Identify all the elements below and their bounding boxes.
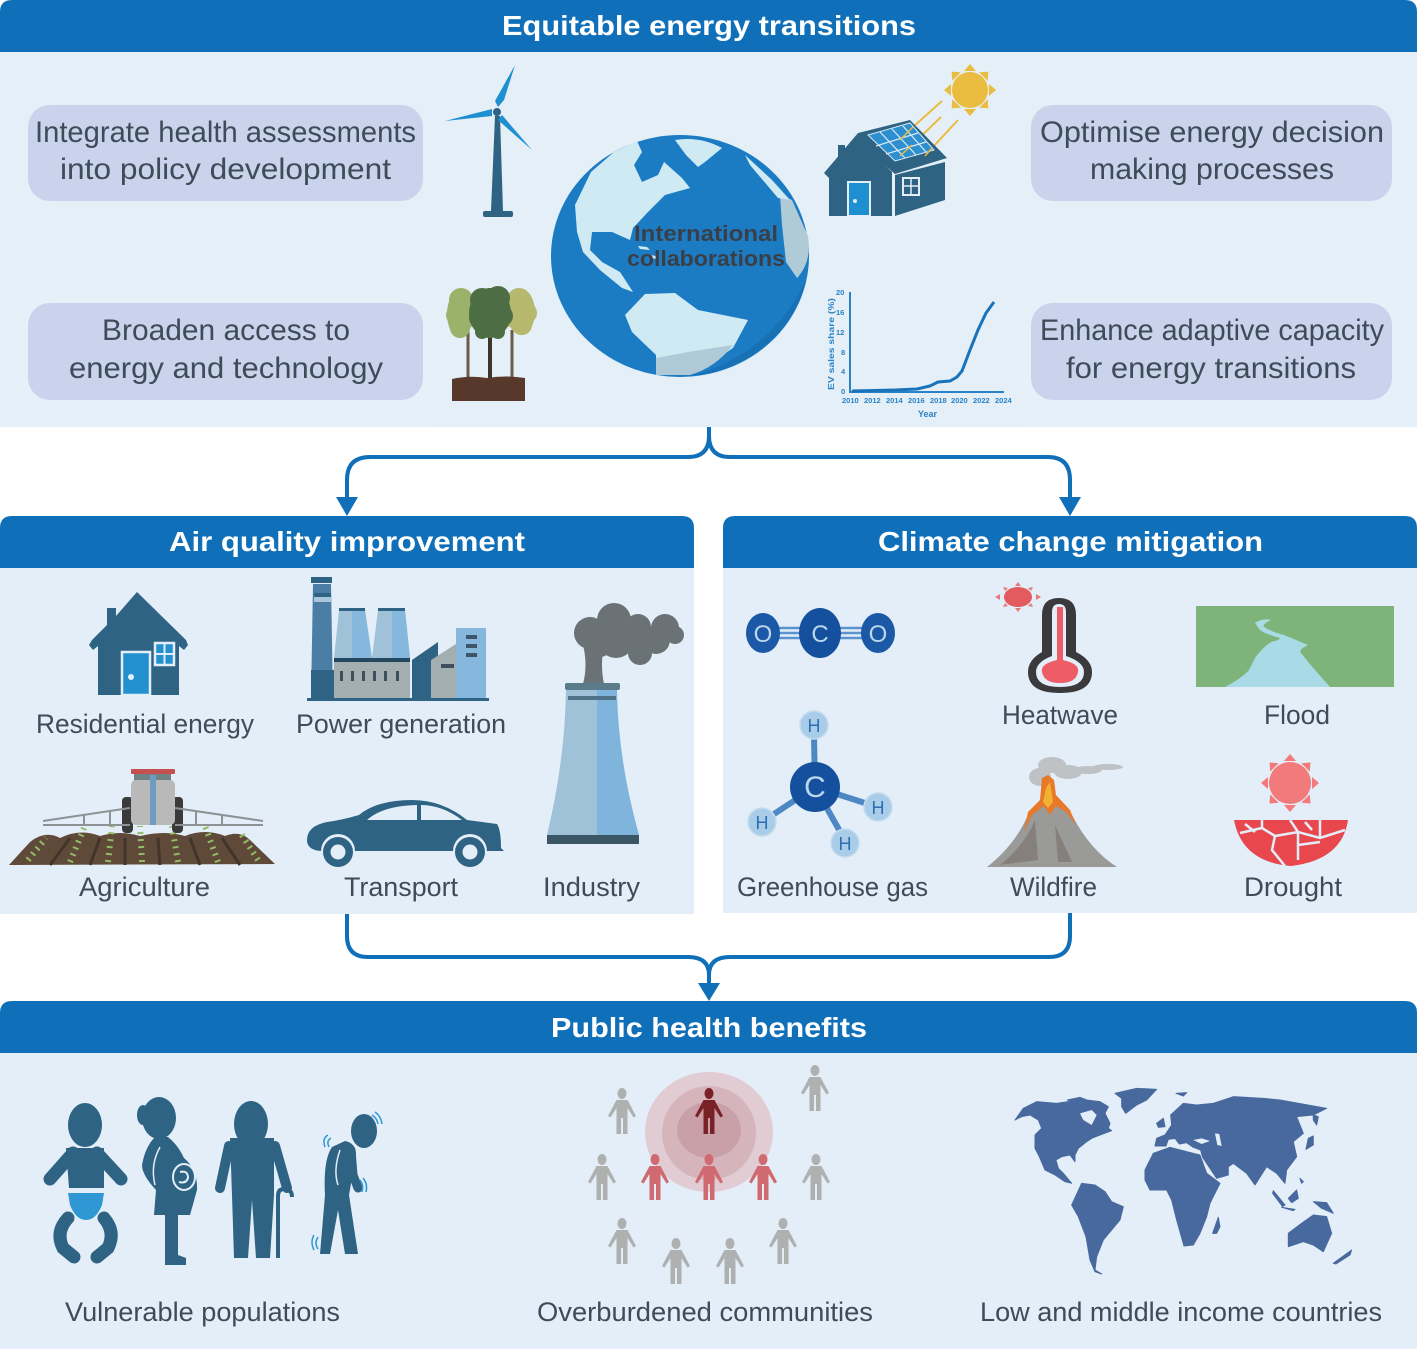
icon: power plant: [307, 577, 489, 701]
icon: world map: [1015, 1088, 1352, 1274]
icon: methane molecule: H: [808, 716, 820, 736]
arrow: energy transitions to air quality and climate: [336, 427, 1081, 516]
callout: enhance adaptive capacity: Enhance adaptive capacity: [1040, 314, 1384, 347]
label: agriculture: Agriculture: [79, 872, 210, 902]
chart: EV sales share: 2014: [886, 396, 904, 405]
chart: EV sales share: 20: [836, 288, 844, 297]
label: residential energy: Residential energy: [36, 709, 254, 739]
label: industry: Industry: [543, 872, 641, 902]
icon: vulnerable people: [50, 1097, 382, 1265]
callout: optimise energy decision making: making processes: [1090, 153, 1334, 186]
arrow: air quality and climate to public health: [347, 913, 1070, 1001]
label: power generation: Power generation: [296, 709, 506, 739]
icon: methane molecule: H: [756, 813, 768, 833]
label: vulnerable populations: Vulnerable populations: [65, 1297, 340, 1327]
icon: overburdened community: [588, 1065, 830, 1284]
icon: car: [307, 800, 504, 867]
label: overburdened communities: Overburdened communities: [537, 1297, 873, 1327]
heading: equitable energy transitions: Equitable energy transitions: [502, 10, 916, 41]
chart: EV sales share: 2016: [908, 396, 925, 405]
label: heatwave: Heatwave: [1002, 700, 1118, 730]
heading: public health benefits: Public health benefits: [551, 1012, 867, 1043]
chart: EV sales share: 12: [836, 328, 844, 337]
icon: methane molecule: H: [872, 798, 884, 818]
heading: equitable energy transitions: [0, 0, 1417, 52]
callout: integrate health assessments: Integrate health assessments: [35, 116, 416, 149]
icon: trees: [446, 286, 537, 401]
icon: flood landscape: [1196, 606, 1394, 687]
icon: volcano wildfire: [987, 757, 1123, 867]
chart: EV sales share: 16: [836, 308, 844, 317]
figure: person with tremor: [312, 1112, 382, 1254]
panel: climate change mitigation: [723, 516, 1417, 913]
label: international collaborations: [627, 221, 785, 271]
label: transport: Transport: [344, 872, 458, 902]
chart: EV sales share: 2020: [951, 396, 968, 405]
chart: EV sales share: 0: [841, 387, 845, 396]
icon: wind turbine: [445, 65, 532, 217]
chart: EV sales share: 2018: [930, 396, 947, 405]
panel: public health benefits: [0, 1001, 1417, 1349]
callout: optimise energy decision making: [1031, 105, 1392, 201]
icon: globe: [551, 135, 809, 377]
icon: industry stack with smoke: [547, 603, 684, 844]
heading: air quality improvement: [0, 516, 694, 568]
callout: integrate health assessments: into policy development: [60, 153, 392, 186]
icon: carbon dioxide molecule: O: [754, 621, 772, 648]
icon: heatwave thermometer: [995, 582, 1092, 693]
label: low and middle income countries: Low and middle income countries: [980, 1297, 1382, 1327]
icon: solar house: [824, 64, 996, 216]
panel: equitable energy transitions: [0, 0, 1417, 427]
chart: EV sales share: 2022: [973, 396, 990, 405]
label: international collaborations: collaborations: [627, 246, 785, 271]
chart: EV sales share: 8: [841, 348, 845, 357]
icon: carbon dioxide molecule: [746, 608, 895, 658]
heading: climate change mitigation: Climate change mitigation: [878, 526, 1263, 557]
callout: broaden access: energy and technology: [69, 352, 383, 385]
figure: pregnant woman: [137, 1097, 197, 1265]
heading: public health benefits: [0, 1001, 1417, 1053]
callout: broaden access: Broaden access to: [102, 314, 350, 347]
icon: residential house: [89, 592, 188, 695]
chart: EV sales share: 2010: [842, 396, 859, 405]
callout: broaden access: [28, 303, 423, 400]
callout: optimise energy decision making: Optimise energy decision: [1040, 116, 1384, 149]
chart: EV sales share: [827, 288, 1013, 419]
label: drought: Drought: [1244, 872, 1343, 902]
heading: air quality improvement: Air quality improvement: [169, 526, 525, 557]
figure: baby: [50, 1103, 121, 1257]
callout: integrate health assessments: [28, 105, 423, 201]
chart: EV sales share: EV sales share (%): [827, 298, 836, 390]
icon: agricultural tractor sprayer: [9, 769, 275, 865]
chart: EV sales share: Year: [918, 409, 938, 419]
icon: methane molecule: C: [804, 771, 826, 804]
label: flood: Flood: [1264, 700, 1330, 730]
icon: methane molecule: H: [838, 834, 852, 854]
heading: climate change mitigation: [723, 516, 1417, 568]
panel: air quality improvement: [0, 516, 694, 914]
label: wildfire: Wildfire: [1010, 872, 1097, 902]
icon: methane molecule: [748, 711, 892, 857]
label: international collaborations: International: [634, 221, 778, 246]
chart: EV sales share: 2012: [864, 396, 881, 405]
icon: carbon dioxide molecule: O: [869, 621, 887, 648]
callout: enhance adaptive capacity: for energy transitions: [1066, 352, 1356, 385]
figure: elderly person with cane: [220, 1101, 292, 1258]
chart: EV sales share: 2024: [995, 396, 1013, 405]
icon: carbon dioxide molecule: C: [811, 621, 829, 648]
callout: enhance adaptive capacity: [1031, 303, 1392, 400]
icon: drought: [1234, 754, 1348, 866]
chart: EV sales share: 4: [841, 367, 846, 376]
label: greenhouse gas: Greenhouse gas: [737, 872, 928, 902]
